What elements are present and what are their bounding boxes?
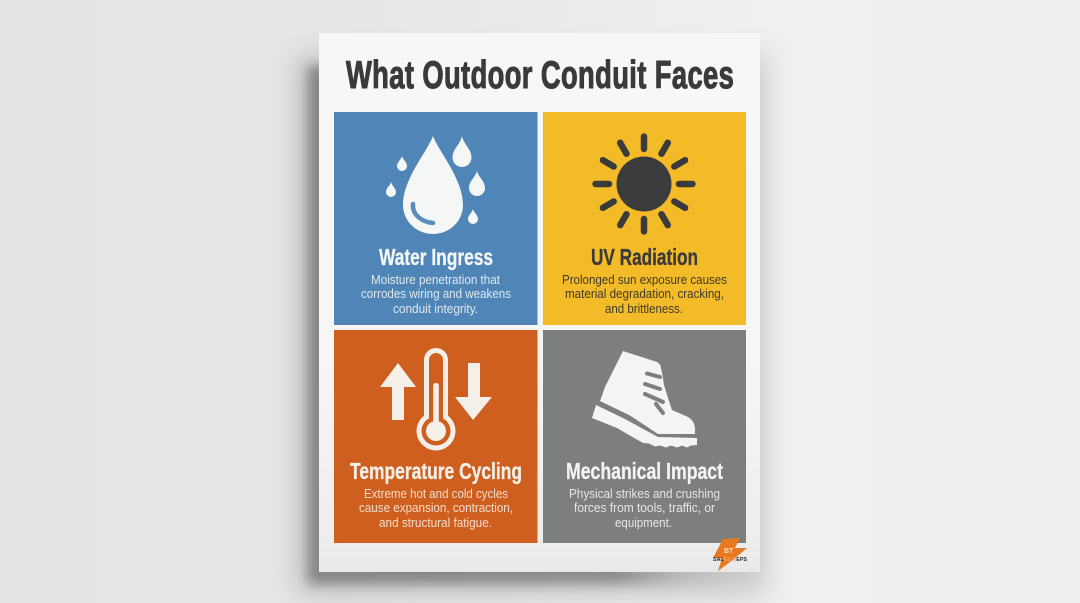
panel: temperature cycling bbox=[334, 330, 538, 543]
text block: uv radiation description bbox=[562, 272, 727, 316]
heading: water ingress: Water Ingress bbox=[379, 244, 493, 270]
panel: mechanical impact bbox=[543, 330, 746, 543]
text block: temperature cycling description bbox=[359, 486, 513, 530]
heading: temperature cycling: Temperature Cycling bbox=[350, 458, 522, 484]
text block: mechanical impact description bbox=[569, 486, 720, 530]
icon: BT Sales Reps logo: BT bbox=[724, 548, 734, 555]
panel: water ingress bbox=[334, 112, 538, 325]
panel: uv radiation bbox=[543, 112, 746, 325]
text block: temperature cycling description: Extreme hot and cold cycles bbox=[364, 486, 508, 501]
heading: mechanical impact: Mechanical Impact bbox=[566, 458, 723, 484]
text block: mechanical impact description: equipment. bbox=[615, 515, 672, 530]
text block: uv radiation description: and brittleness. bbox=[605, 301, 683, 316]
icon: thermometer with arrows bbox=[380, 348, 492, 450]
icon: work boot bbox=[592, 351, 697, 448]
icon: BT Sales Reps logo: SALES REPS bbox=[713, 557, 748, 563]
icon: BT Sales Reps logo bbox=[713, 538, 748, 571]
text block: temperature cycling description: cause expansion, contraction, bbox=[359, 500, 513, 515]
text block: water ingress description: corrodes wiring and weakens bbox=[361, 286, 511, 301]
text block: water ingress description: Moisture penetration that bbox=[371, 272, 500, 287]
icon: water drops bbox=[386, 136, 485, 234]
text block: water ingress description bbox=[361, 272, 511, 316]
text block: uv radiation description: material degradation, cracking, bbox=[565, 286, 724, 301]
heading: uv radiation: UV Radiation bbox=[591, 244, 698, 270]
text block: temperature cycling description: and structural fatigue. bbox=[379, 515, 492, 530]
icon: sun bbox=[596, 136, 692, 232]
text block: mechanical impact description: forces from tools, traffic, or bbox=[574, 500, 716, 515]
text block: water ingress description: conduit integrity. bbox=[393, 301, 478, 316]
title: What Outdoor Conduit Faces bbox=[346, 54, 734, 97]
panel: poster sheet bbox=[319, 33, 760, 572]
text block: mechanical impact description: Physical strikes and crushing bbox=[569, 486, 720, 501]
text block: uv radiation description: Prolonged sun exposure causes bbox=[562, 272, 727, 287]
